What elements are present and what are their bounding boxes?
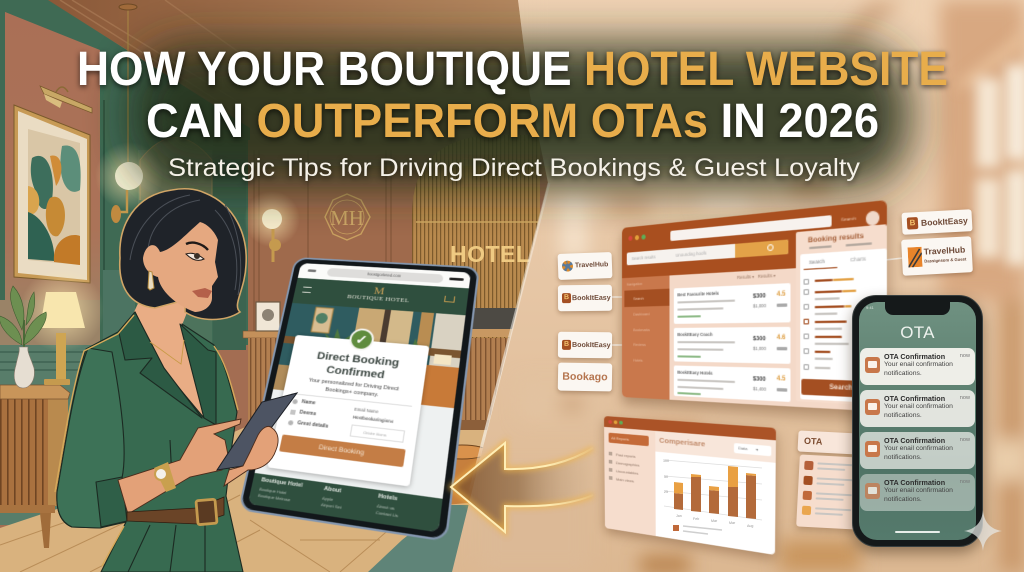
icon: B logo (907, 217, 918, 230)
axis labels: Feb (693, 517, 699, 521)
brand tag: BookItEasy (558, 285, 612, 311)
notification 4: Your enail confirmation (884, 487, 953, 494)
axis labels: Mar (711, 519, 718, 523)
chart header: Comperisare (659, 436, 705, 448)
notification 4: OTA Confirmation (884, 478, 945, 487)
axis labels: 50 (664, 475, 668, 479)
globe sconce left (95, 4, 163, 223)
form fields: Deems (299, 410, 317, 417)
arched slatted reception wall with HOTEL sign: HOTEL (450, 241, 530, 267)
notification 1: notifications. (884, 370, 922, 376)
smartphone: OTA notifications (852, 295, 983, 547)
search button: Search (829, 384, 853, 392)
result card 2: $1,000 (753, 346, 766, 351)
direct booking button (279, 434, 406, 467)
sidebar (604, 427, 656, 536)
form fields (288, 398, 406, 443)
arrow (451, 443, 593, 532)
brand tag: TravelHub right: TravelHub (923, 245, 966, 257)
notification 4: now (960, 479, 970, 485)
form fields: Email Name (354, 407, 379, 414)
phone screen (859, 302, 976, 540)
notification 3: OTA Confirmation (884, 436, 945, 445)
sidebar: Demographics (616, 460, 639, 468)
result card 3: $1,400 (753, 386, 766, 392)
site header (292, 278, 469, 315)
green dress (57, 312, 243, 572)
notification 2 (860, 390, 975, 427)
axis labels: Aug (747, 524, 753, 528)
tablet screen (248, 263, 471, 532)
results list: Search (809, 258, 825, 265)
sidebar navigation: Search (633, 296, 644, 301)
teal rug (368, 505, 500, 572)
brand tag: TravelHub left (558, 252, 612, 280)
earring (148, 271, 154, 290)
icon: B logo (562, 293, 571, 303)
sleeve (57, 348, 126, 528)
confirmation message: Your personalized for Driving Direct (308, 378, 399, 392)
axis labels: 25 (664, 490, 668, 494)
sidebar navigation: Dashboard (633, 311, 649, 317)
picture light (40, 86, 92, 113)
brand tag: Bookago: Bookago (562, 371, 608, 383)
result card 2: $300 (753, 336, 766, 342)
sidebar navigation: Bookmarks (633, 327, 650, 332)
site footer (248, 473, 443, 532)
necklace (150, 340, 184, 364)
notch (885, 302, 950, 315)
result card 1: $300 (753, 293, 766, 300)
form fields: Name (301, 399, 316, 406)
site footer: About (323, 486, 342, 495)
brand tag: Bookago (558, 363, 612, 391)
result card 2 (674, 327, 790, 364)
site footer: Hotels (378, 493, 398, 502)
result card 3 (674, 365, 790, 402)
sidebar: Uncountables (616, 469, 638, 476)
notification 3: Your enail confirmation (884, 445, 953, 452)
headline: CAN OUTPERFORM OTAs IN 2026 (146, 95, 879, 148)
OTA heading: OTA (900, 323, 935, 342)
browser address bar (298, 263, 471, 288)
browser address bar: hoostgorleted.com (367, 272, 401, 278)
status bar: 9:41 (866, 305, 874, 310)
brand tag: BookItEasy right (901, 209, 973, 235)
axis labels: Jan (676, 514, 682, 518)
hair strands (130, 195, 241, 295)
confirmation message: Bookings+ company. (325, 387, 379, 398)
sidebar navigation: Navigation (627, 281, 642, 287)
floor (0, 425, 530, 572)
axis labels (663, 459, 753, 528)
panel heading: Booking results (808, 232, 864, 245)
skirt folds (128, 440, 205, 572)
brand tag: BookItEasy right: BookItEasy (921, 215, 968, 228)
sidebar navigation: Reviews (633, 342, 646, 347)
table lamp (20, 268, 104, 385)
notification 2: Your enail confirmation (884, 403, 953, 410)
hotel monogram crest: MH (330, 206, 364, 230)
icon: B logo: B (564, 294, 569, 301)
results list: Charts (850, 256, 866, 263)
headline: HOW YOUR BOUTIQUE HOTEL WEBSITE (77, 43, 948, 96)
top bar (622, 200, 887, 278)
OTA tag (797, 430, 859, 455)
result card 3: $300 (753, 376, 766, 383)
notification 1: Your enail confirmation (884, 361, 953, 368)
all reports button: All Reports (611, 436, 629, 442)
form fields: Oridre itions (363, 430, 387, 438)
site header: M (373, 284, 386, 297)
search button (801, 379, 883, 398)
sidebar navigation (622, 275, 669, 400)
icon: envelope (865, 441, 880, 457)
result card 2: 4.6 (777, 335, 786, 341)
site footer: Contact Us (375, 510, 398, 518)
results header: Results ▾ Results ▾ (737, 273, 776, 280)
reception desk (243, 302, 530, 438)
sleeve cuff (96, 477, 127, 527)
orange lounge chair (436, 445, 500, 528)
subtitle: Strategic Tips for Driving Direct Bookings & Guest Loyalty (168, 154, 861, 182)
small tablet in hand (217, 393, 297, 470)
notification 1 (860, 348, 975, 385)
OTA list panel (796, 454, 860, 530)
OTA tag: OTA (804, 436, 823, 447)
icon: B logo (562, 340, 571, 350)
dark title backdrop (130, 44, 910, 187)
axis labels: Mar (729, 521, 736, 525)
diagonal divider (468, 183, 549, 500)
hotel monogram crest (325, 194, 370, 240)
icon: gear logo (562, 260, 573, 272)
icon: sparkle (964, 510, 1002, 551)
home indicator (895, 531, 940, 533)
neck and chest (134, 278, 204, 418)
green check badge (348, 328, 376, 351)
sidebar: Past reports (616, 452, 635, 459)
tablet: direct booking page (238, 257, 480, 542)
icon: envelope (865, 483, 880, 499)
icon: B logo: B (564, 341, 569, 348)
booking results panel (796, 224, 887, 406)
brand tag: BookItEasy second (558, 332, 612, 358)
icon: envelope (865, 399, 880, 415)
fingers holding tablet (224, 426, 278, 486)
notification 3: now (960, 437, 970, 443)
result card 1: $1,000 (753, 303, 766, 309)
green check badge: ✓ (354, 332, 369, 347)
address bar (670, 215, 832, 241)
brand tag: TravelHub right (901, 236, 973, 276)
notification 1: OTA Confirmation (884, 352, 945, 361)
result card 1 (674, 283, 790, 324)
brand tag: BookItEasy: BookItEasy (572, 294, 611, 302)
result card 3: 4.5 (777, 376, 786, 383)
notification 2: notifications. (884, 412, 922, 418)
site footer: Boutique Melrose (258, 493, 291, 503)
site footer: Boutique Hotel (259, 486, 287, 495)
sidebar: Main views (616, 477, 634, 483)
notification 1: now (960, 353, 970, 359)
arched slatted reception wall with HOTEL sign (412, 135, 540, 340)
search field: Search results (632, 254, 656, 261)
search field (627, 240, 788, 265)
lips (192, 288, 212, 298)
leather belt (127, 497, 224, 525)
result card 1: 4.5 (777, 291, 786, 298)
site footer: About us (376, 503, 395, 511)
form fields: Grest details (297, 420, 329, 430)
axis labels: 100 (663, 459, 669, 463)
site footer: Boutique Hotel (261, 477, 303, 489)
notification 3 (860, 432, 975, 469)
potted plant (0, 286, 46, 388)
results list (800, 248, 887, 403)
headline (77, 43, 948, 148)
confirmation heading: Direct Booking (316, 350, 400, 369)
tagline: Dassignsom & Guest (924, 256, 966, 264)
face (143, 222, 218, 312)
site header: BOUTIQUE HOTEL (347, 294, 410, 304)
direct booking button: Direct Booking (318, 444, 365, 457)
icon: road logo (908, 246, 922, 268)
icon: B logo: B (909, 218, 916, 227)
browser window: OTA booking results (622, 200, 887, 412)
chart legend (673, 525, 722, 534)
booking confirmation card (267, 335, 429, 486)
chart header: Data ▾ (738, 445, 758, 452)
comparison window (604, 416, 776, 555)
result card 1: Best Favourite Hotels (677, 291, 719, 297)
profile avatar (866, 210, 879, 226)
wall and ceiling (0, 0, 560, 572)
notification 2: OTA Confirmation (884, 394, 945, 403)
brand tag: TravelHub left: TravelHub (575, 261, 608, 269)
globe sconce right (244, 191, 300, 262)
hair (120, 189, 246, 320)
site footer: Apple (322, 495, 334, 502)
eye and brow (186, 243, 208, 260)
side cabinet (0, 385, 70, 548)
sidebar navigation: Hotels (633, 358, 643, 363)
window title bar (604, 416, 776, 440)
confirmation heading (316, 350, 400, 381)
notification 4: notifications. (884, 496, 922, 502)
icon: envelope (865, 357, 880, 373)
right lapel (180, 324, 216, 425)
brand tag: BookItEasy second: BookItEasy (572, 341, 611, 349)
framed abstract painting (14, 105, 90, 283)
gold dress piping (55, 315, 238, 566)
chart header (655, 431, 776, 463)
site footer: Airport Set (321, 502, 342, 510)
left lapel (119, 312, 202, 418)
all reports button (609, 433, 649, 446)
search field: Unounding hoofs (676, 250, 706, 258)
form fields: Hostbookaringions (353, 415, 394, 424)
arm and pointing hand (118, 419, 241, 514)
result card 2: BookItEasy Coach (677, 332, 713, 337)
notification 4 (860, 474, 975, 511)
hero image of lobby (273, 302, 466, 408)
confirmation heading: Confirmed (325, 364, 385, 381)
blurred hotel interior (440, 0, 1024, 572)
wrist watch (154, 462, 176, 492)
notification 3: notifications. (884, 454, 922, 460)
top bar: Search (841, 215, 856, 222)
notification 2: now (960, 395, 970, 401)
result card 3: BookItEasy Hotels (677, 370, 713, 376)
